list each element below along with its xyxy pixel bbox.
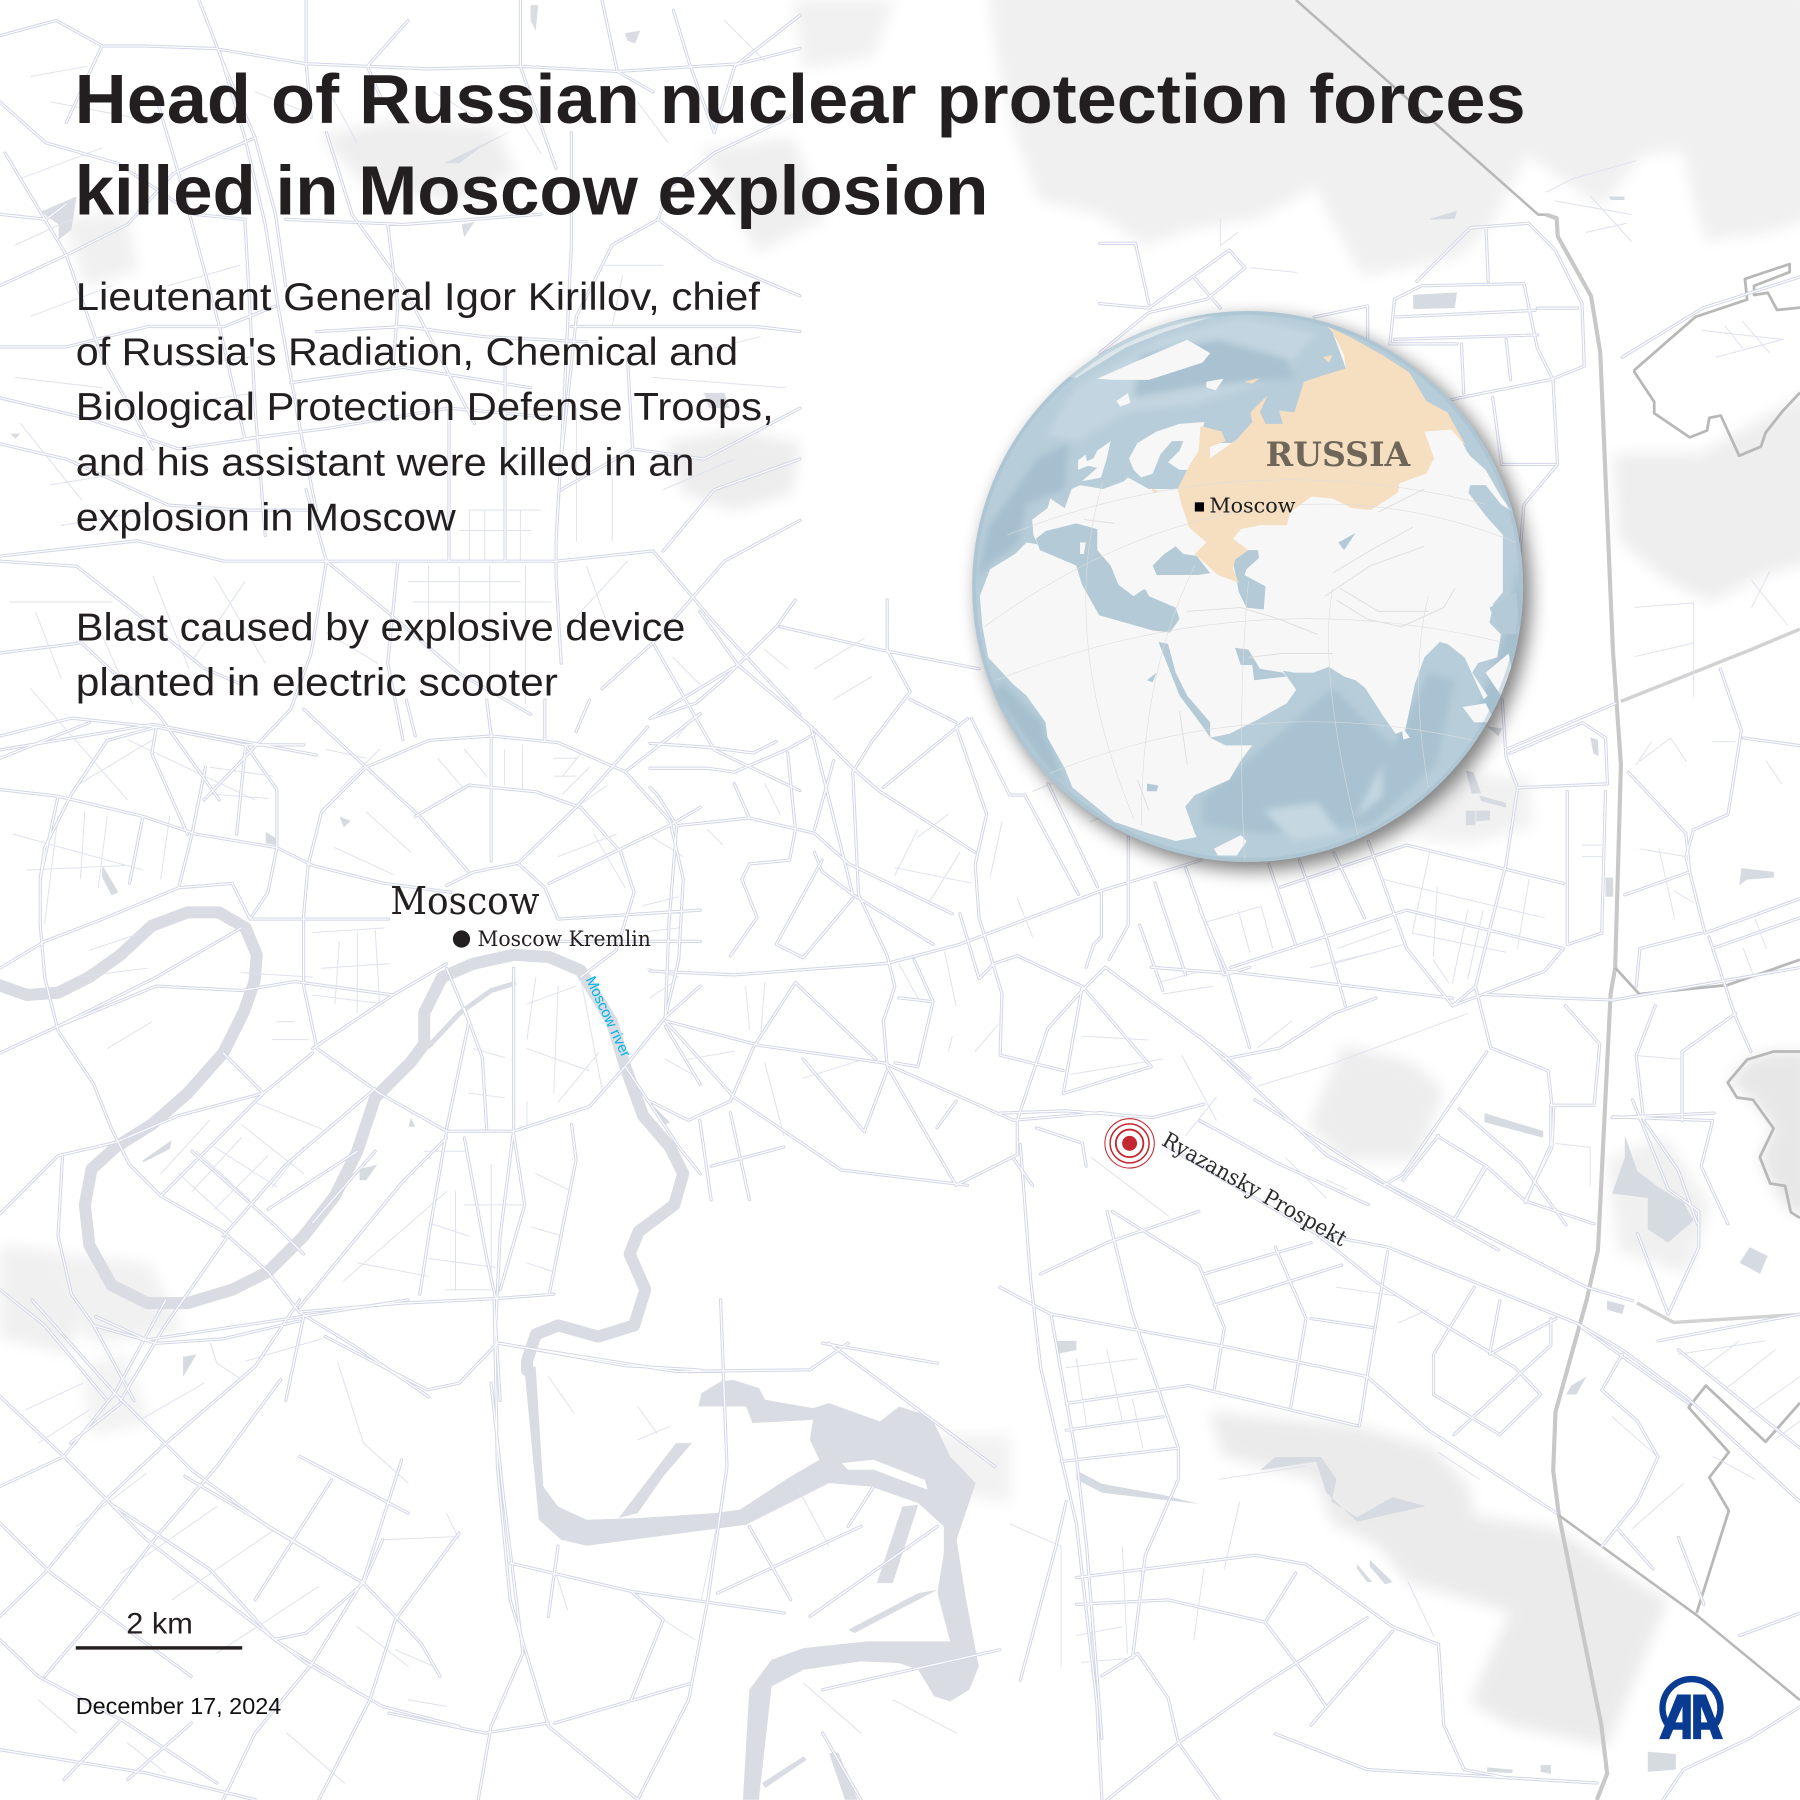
graticule [984,480,1516,860]
label: Moscow Kremlin: Moscow Kremlin [478,927,651,952]
marker: Moscow on globe [1195,502,1204,512]
scale bar [76,1608,242,1650]
icon: explosion location [1105,1119,1154,1168]
mountain shading [1084,489,1455,810]
label: Moscow on globe: Moscow [1209,494,1296,518]
description text: explosion in Moscow [76,496,457,539]
description text: Lieutenant General Igor Kirillov, chief [76,276,760,319]
ocean depth shading [977,317,1524,841]
globe inset [950,290,1550,890]
label: RUSSIA: RUSSIA [1266,435,1411,474]
label: Moscow river: Moscow river [582,974,634,1060]
description text: Biological Protection Defense Troops, [76,386,774,429]
description text [76,276,774,705]
logo: AA [1659,1679,1723,1739]
description text: planted in electric scooter [76,662,558,705]
globe limb [974,313,1521,860]
title: Head of Russian nuclear protection forces [75,60,1526,138]
highway ring and administrative boundaries [1296,0,1800,1800]
title: killed in Moscow explosion [75,152,988,230]
inland seas [1036,523,1520,791]
description text: and his assistant were killed in an [76,441,695,484]
description text: Blast caused by explosive device [76,607,685,650]
globe map [972,311,1524,862]
scale bar: 2 km [126,1608,193,1641]
label: Moscow: Moscow [390,879,540,923]
label: Ryazansky Prospekt: Ryazansky Prospekt [1158,1128,1351,1252]
marker: Moscow Kremlin [453,930,470,948]
land [980,332,1503,841]
title [75,60,1526,230]
date: December 17, 2024 [76,1693,281,1719]
Russia [1178,326,1467,583]
Italy and islands [1080,542,1146,590]
description text: of Russia's Radiation, Chemical and [76,331,738,374]
globe shadow [978,318,1531,870]
